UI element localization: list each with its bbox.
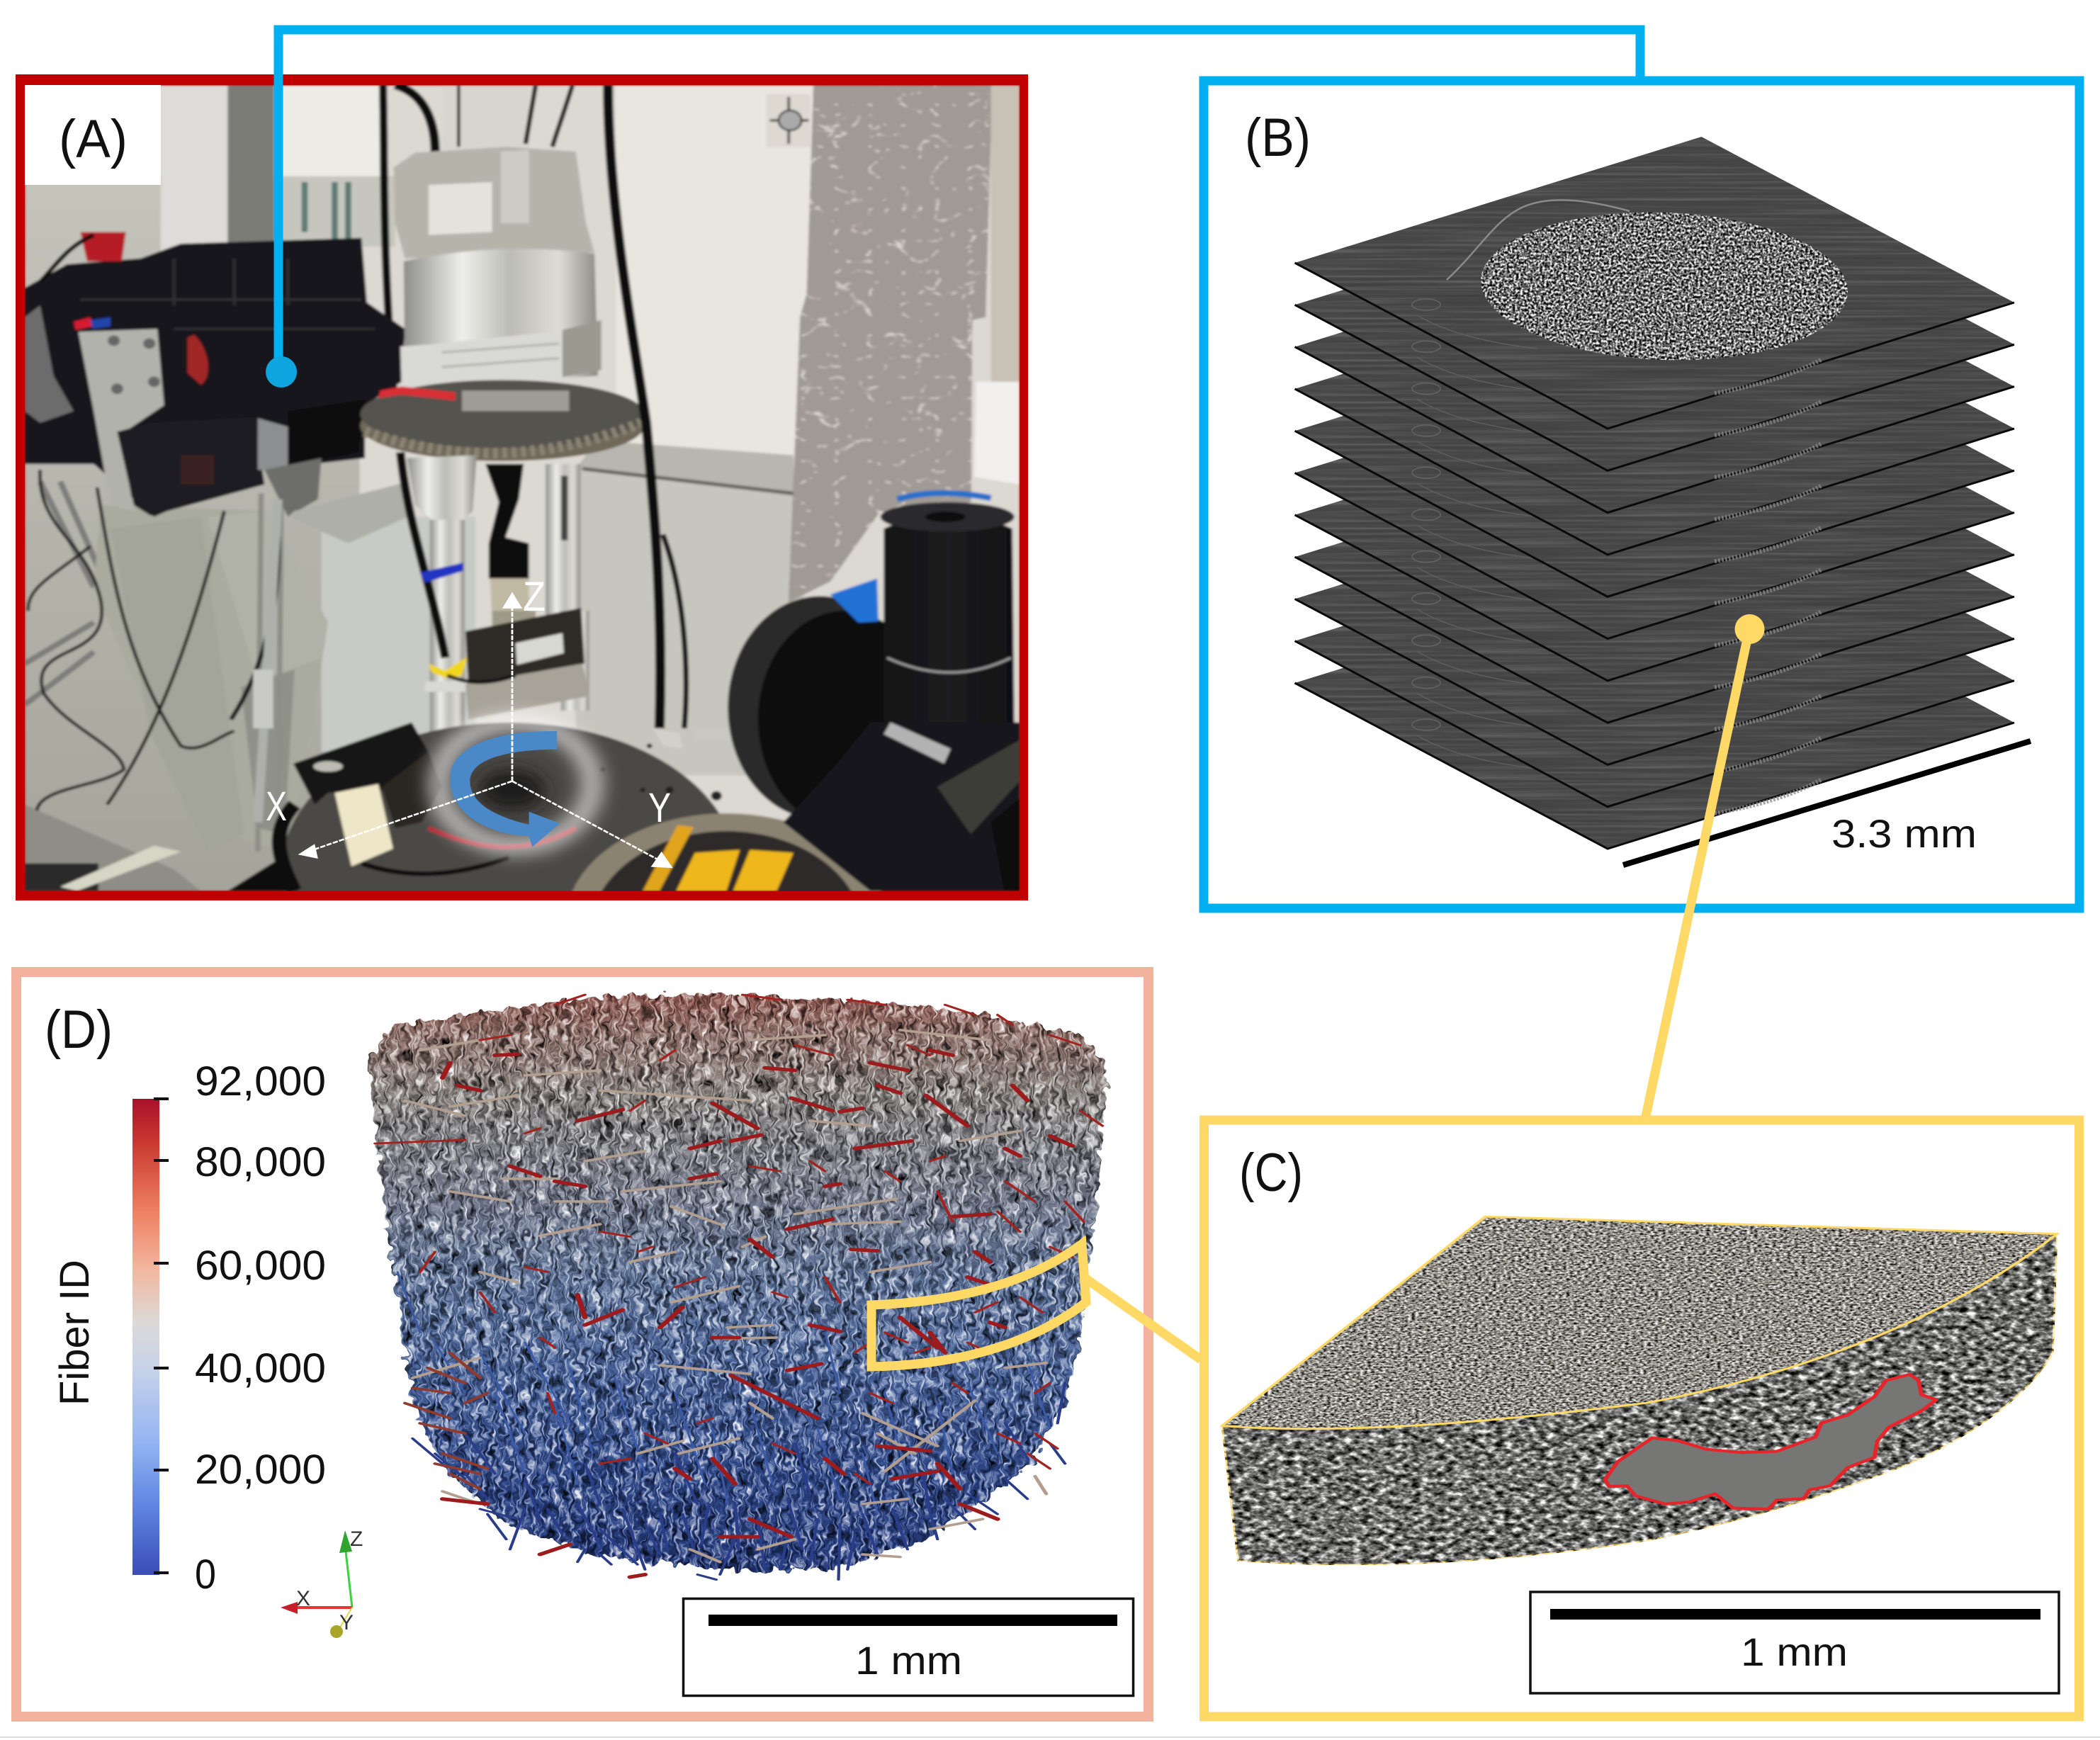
aluminium foil <box>789 85 992 602</box>
load cell <box>465 608 585 693</box>
panel A: photo of the tomography loading rig <box>16 74 1028 900</box>
photograph: test rig <box>25 85 1020 891</box>
fiber cloud <box>368 993 1107 1580</box>
gray linear stage column <box>94 505 328 852</box>
label (D): (D) <box>45 1000 113 1060</box>
colorbar labels: 80,000 <box>195 1139 326 1185</box>
rail on wall <box>580 441 795 492</box>
sample cross-section on top slice <box>1479 206 1850 366</box>
blue fiber fringe <box>412 1383 1065 1580</box>
scale box 1 mm <box>683 1598 1134 1696</box>
axis label Z: Z <box>523 574 546 620</box>
colorbar title: Fiber ID <box>52 1260 98 1406</box>
colorbar labels: 0 <box>195 1552 216 1598</box>
small orientation axes: Y <box>339 1611 354 1634</box>
lath region outlined in red <box>1605 1374 1936 1509</box>
tan fibers <box>405 1030 1046 1562</box>
wedge top face <box>1222 1216 2057 1429</box>
axis label Y: Y <box>648 785 671 831</box>
white label box <box>25 85 161 185</box>
small orientation axes <box>281 1527 363 1638</box>
sample grips <box>485 464 529 579</box>
load column <box>407 455 477 520</box>
scale bar 3.3 mm <box>1623 741 2031 865</box>
black motor <box>117 417 264 516</box>
rotary stage <box>281 723 737 1016</box>
holder on stage <box>293 723 429 805</box>
axis label X: X <box>266 784 287 830</box>
scale box 1 mm <box>1530 1592 2059 1693</box>
scale box 1 mm: 1 mm <box>1741 1629 1848 1674</box>
connector: yellow line from B to C <box>1645 614 1764 1119</box>
red fibers <box>443 1050 1073 1577</box>
XYZ axes <box>298 592 673 868</box>
panel B: stack of reconstructed slices <box>1204 81 2079 908</box>
colorbar <box>132 1099 169 1575</box>
scale box 1 mm: 1 mm <box>855 1638 962 1683</box>
small orientation axes: Z <box>350 1527 363 1551</box>
left background cables and equipment <box>25 480 98 707</box>
colorbar labels: 92,000 <box>195 1058 326 1105</box>
small orientation axes: X <box>296 1587 310 1610</box>
panel C: zoomed wedge volume <box>1204 1120 2079 1717</box>
foreground dark lens with yellow text <box>566 813 887 1031</box>
colorbar labels: 60,000 <box>195 1243 326 1289</box>
connector: yellow line from D to C <box>1084 1277 1201 1360</box>
label (C): (C) <box>1239 1143 1303 1203</box>
slice stack <box>1295 137 2014 849</box>
colorbar labels: 20,000 <box>195 1447 326 1493</box>
colorbar labels <box>195 1058 326 1598</box>
wedge volume <box>1222 1216 2057 1565</box>
right post <box>546 464 580 616</box>
wedge side face <box>1222 1234 2057 1565</box>
actuator head <box>394 147 594 259</box>
camera body and lens <box>728 596 913 819</box>
black cables on column <box>97 487 235 748</box>
wall cables <box>608 85 660 728</box>
colorbar labels: 40,000 <box>195 1345 326 1391</box>
panel D: fiber segmentation <box>16 972 1148 1717</box>
black kinematic stage <box>25 238 405 517</box>
aluminium bracket <box>79 329 164 511</box>
scale label: 3.3 mm <box>1831 811 1977 856</box>
yellow region of interest <box>871 1244 1086 1367</box>
connector: blue line from A to B <box>266 30 1640 388</box>
label (A): (A) <box>59 109 128 169</box>
gear disk <box>358 419 645 463</box>
label (B): (B) <box>1245 108 1311 168</box>
rotation arrow with glow <box>439 723 592 847</box>
